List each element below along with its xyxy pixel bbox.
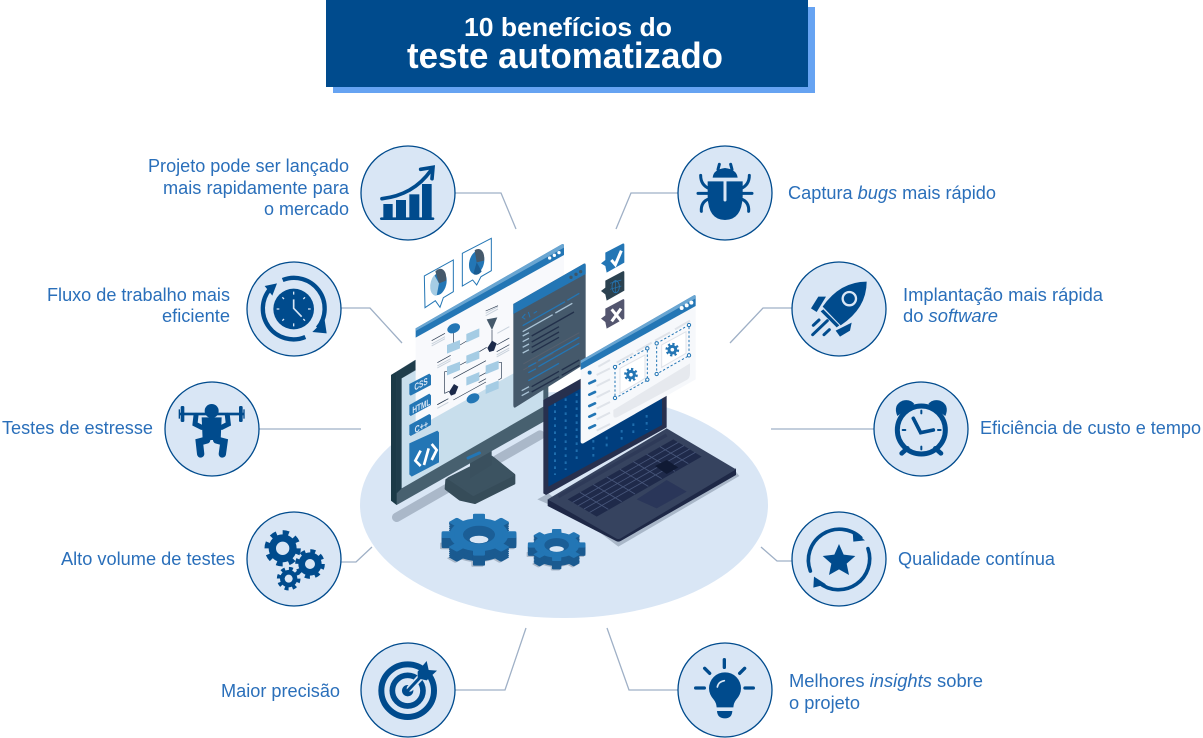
label: Implantação mais rápida [903,285,1104,305]
label: Qualidade contínua [898,549,1056,569]
connector [616,193,678,229]
label: Fluxo de trabalho mais [47,285,230,305]
benefit: Alto volume de testes [61,512,372,606]
benefit: Implantação [730,262,1104,356]
label: do software [903,306,998,326]
tag CSS: CSS [414,376,428,393]
benefit: Projeto pode ser lançado [148,146,516,240]
icon: weightlifter [179,404,245,454]
icon: star with cycle arrows [808,529,870,590]
circle [678,146,772,240]
icon: growth chart [380,167,434,220]
circle [874,382,968,476]
label: o mercado [264,199,349,219]
connector [761,547,792,561]
label [148,156,350,219]
icon: alarm clock [896,400,947,454]
monitor [391,297,548,505]
central illustration [391,238,739,571]
laptop [537,330,739,547]
label [789,671,983,713]
central floor ellipse [360,392,768,618]
label: mais rapidamente para [163,178,350,198]
settings window [581,295,696,443]
circle [247,262,341,356]
connector [730,308,792,343]
connector [455,628,526,690]
benefit: Fluxo de trabalho [47,262,402,356]
benefit: Testes de estresse [2,382,361,476]
circle [247,512,341,606]
label [903,285,1104,326]
tag HTML: HTML [412,397,430,416]
connector [341,547,372,562]
icon: gears [267,533,323,589]
circle [678,643,772,737]
title shadow [333,7,815,93]
pie chart bubbles [424,238,491,308]
language tags [409,374,431,436]
circle [361,146,455,240]
label: Captura bugs mais rápido [788,183,996,203]
small gear [527,529,585,571]
icon: light bulb [696,660,753,718]
label: Melhores insights sobre [789,671,983,691]
icon: target with arrow [381,661,437,717]
icon: bug [698,164,752,220]
connector [341,308,402,343]
label: Projeto pode ser lançado [148,156,349,176]
label: Testes de estresse [2,418,153,438]
connector [455,193,516,229]
connector [607,628,678,690]
circle [792,512,886,606]
label: Eficiência de custo e tempo [980,418,1201,438]
tag C++: C++ [415,419,428,436]
benefit: Eficiência [771,382,1201,476]
title box [326,0,808,87]
label: Maior precisão [221,681,340,701]
flowchart window [416,244,564,428]
label: o projeto [789,693,860,713]
circle [361,643,455,737]
status badges [601,243,624,329]
title line 2: teste automatizado [407,35,723,76]
circle [792,262,886,356]
icon: clock with cycle arrows [263,278,327,339]
benefit: Qualidade contínua [761,512,1056,606]
benefit: Melhores insights [607,628,983,737]
connector [771,428,874,430]
circle [165,382,259,476]
monitor floor shadow [397,435,540,517]
label: eficiente [162,306,230,326]
floor gears [440,514,585,571]
title line 1: 10 benefícios do [464,12,672,42]
title banner [326,0,815,93]
code editor window [513,264,586,408]
large gear [440,514,516,567]
benefit: Maior precisão [221,628,526,737]
label [47,285,230,326]
code tag box [409,431,439,477]
connector [259,428,361,430]
benefit: Captura bugs [616,146,996,240]
icon: rocket [811,282,867,337]
label: Alto volume de testes [61,549,235,569]
